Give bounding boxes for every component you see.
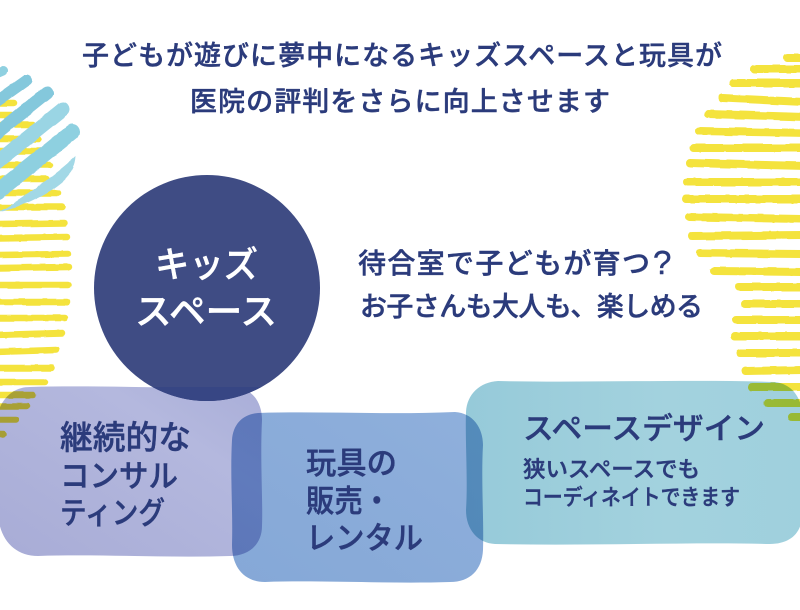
text block: waiting room: お子さんも大人も、楽しめる xyxy=(360,292,703,322)
panel: consulting xyxy=(0,386,262,557)
decoration: right yellow stripes xyxy=(686,58,800,417)
toy label: 販売・ xyxy=(306,484,391,519)
consulting label: ティング xyxy=(60,496,165,531)
title: 子どもが遊びに夢中になるキッズスペースと玩具が xyxy=(82,41,722,71)
space design heading: スペースデザイン xyxy=(523,413,765,446)
circle label: スペース xyxy=(135,291,277,332)
consulting label: 継続的な xyxy=(60,419,191,456)
decoration: left yellow stripes xyxy=(0,103,69,434)
space design description xyxy=(523,457,740,510)
title: 医院の評判をさらに向上させます xyxy=(190,87,610,117)
circle label xyxy=(135,244,277,332)
text block: waiting room: 待合室で子どもが育つ xyxy=(358,248,650,279)
circle overlap xyxy=(152,387,262,401)
circle: kids space xyxy=(94,175,320,401)
panel: space design xyxy=(466,381,800,545)
toy label: レンタル xyxy=(306,521,423,556)
space design description: 狭いスペースでも xyxy=(523,457,700,482)
consulting label: コンサル xyxy=(60,459,178,494)
panel: toy sales and rental xyxy=(231,412,483,583)
title xyxy=(82,41,722,117)
text block: waiting room xyxy=(358,244,703,322)
toy label: 玩具の xyxy=(306,446,397,481)
circle label: キッズ xyxy=(155,244,258,285)
space design description: コーディネイトできます xyxy=(523,485,740,510)
text block: waiting room: ? xyxy=(653,244,671,281)
toy label xyxy=(306,446,423,556)
consulting label xyxy=(60,419,191,531)
decoration: left blue brush strokes xyxy=(0,71,76,212)
